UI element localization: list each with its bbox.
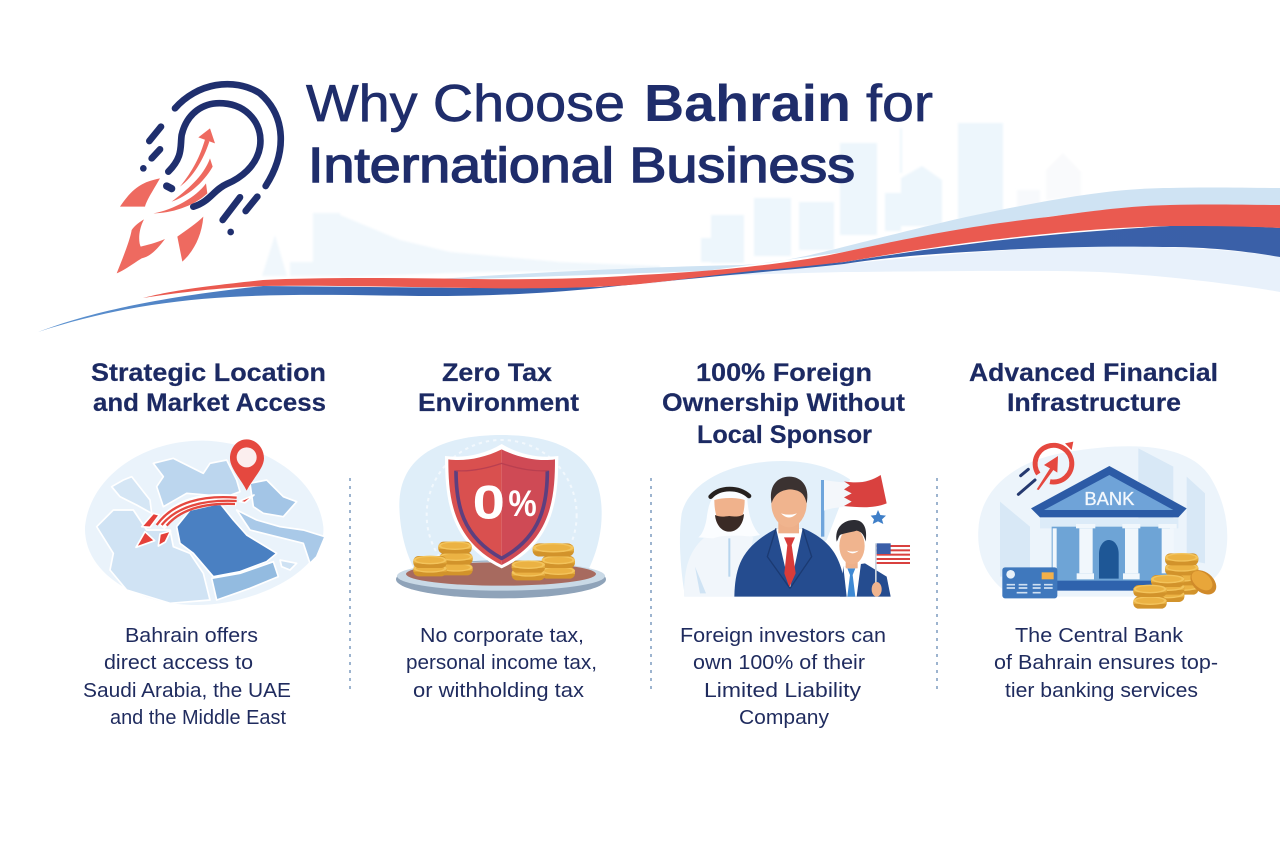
body text: zero tax: personal income tax, [406, 652, 597, 674]
skyline: left background [262, 213, 660, 277]
body text: strategic location: Bahrain offers [125, 625, 258, 647]
heading [91, 359, 326, 417]
heading [662, 359, 906, 449]
heading: Local Sponsor [697, 421, 872, 449]
divider 2 [650, 478, 652, 694]
panel: financial infrastructure [969, 359, 1227, 609]
icon: bank building: BANK [1084, 488, 1135, 509]
skyline: right background [701, 123, 1081, 263]
background towers [1000, 448, 1205, 577]
coin stacks [1133, 553, 1221, 609]
heading: and Market Access [93, 389, 326, 417]
heading: Strategic Location [91, 359, 326, 387]
star [871, 510, 886, 524]
heading: Advanced Financial [969, 359, 1218, 387]
icon: bank building [978, 442, 1227, 609]
panel: zero tax [396, 359, 606, 598]
body text: foreign ownership [680, 625, 886, 729]
panel: strategic location [85, 359, 326, 605]
body text: financial infrastructure: tier banking services [1005, 680, 1198, 702]
body text: strategic location [83, 625, 291, 729]
panel: foreign ownership [662, 359, 910, 597]
rocket flames and fins [117, 128, 215, 273]
body text: zero tax: No corporate tax, [420, 625, 584, 647]
coins left [439, 563, 473, 575]
body text: financial infrastructure: The Central Bank [1015, 625, 1184, 647]
swoosh ribbon [38, 188, 1280, 332]
route arcs [157, 497, 237, 526]
title: International Business [308, 139, 855, 193]
icon: map with pin [85, 439, 325, 605]
icon: shield with coins: % [508, 482, 537, 524]
door [1099, 540, 1119, 579]
heading: Environment [418, 389, 580, 417]
icon: shield with coins [396, 435, 606, 598]
central investor [734, 477, 846, 597]
target arrow [1018, 442, 1073, 494]
rocket fins [136, 495, 254, 547]
body text: zero tax: or withholding tax [413, 680, 584, 702]
body text: strategic location: direct access to [104, 652, 253, 674]
body text: financial infrastructure [994, 625, 1218, 702]
logo: rocket with arcs [117, 84, 281, 273]
Gulf investor [684, 488, 760, 597]
body text: foreign ownership: Limited Liability [704, 680, 861, 702]
body text: strategic location: and the Middle East [110, 707, 286, 729]
heading: Infrastructure [1007, 389, 1181, 417]
title: Why Choose [306, 75, 625, 133]
credit card [1002, 567, 1057, 598]
heading: Zero Tax [442, 359, 552, 387]
arcs and dashes [140, 84, 281, 235]
columns [1053, 524, 1177, 579]
coins right [542, 566, 575, 579]
platform [396, 560, 606, 598]
title [306, 75, 933, 193]
body text: strategic location: Saudi Arabia, the UAE [83, 680, 291, 702]
0% label: 0 [473, 476, 505, 529]
map pin [230, 439, 264, 491]
divider 1 [349, 478, 351, 694]
body text: financial infrastructure: of Bahrain ensures top- [994, 652, 1218, 674]
heading [418, 359, 580, 417]
divider 3 [936, 478, 938, 694]
title: for [866, 75, 933, 133]
heading: Ownership Without [662, 389, 906, 417]
body text: zero tax [406, 625, 597, 702]
roof [1031, 466, 1187, 517]
body text: foreign ownership: Foreign investors can [680, 625, 886, 647]
US flag [872, 543, 910, 597]
body text: foreign ownership: own 100% of their [693, 652, 865, 674]
Bahrain flag [821, 475, 887, 537]
icon: investors with flags [680, 461, 910, 597]
small investor [836, 520, 891, 597]
body text: foreign ownership: Company [739, 707, 829, 729]
title: Bahrain [644, 75, 851, 133]
heading: 100% Foreign [696, 359, 872, 387]
heading [969, 359, 1218, 417]
shield [445, 444, 558, 568]
